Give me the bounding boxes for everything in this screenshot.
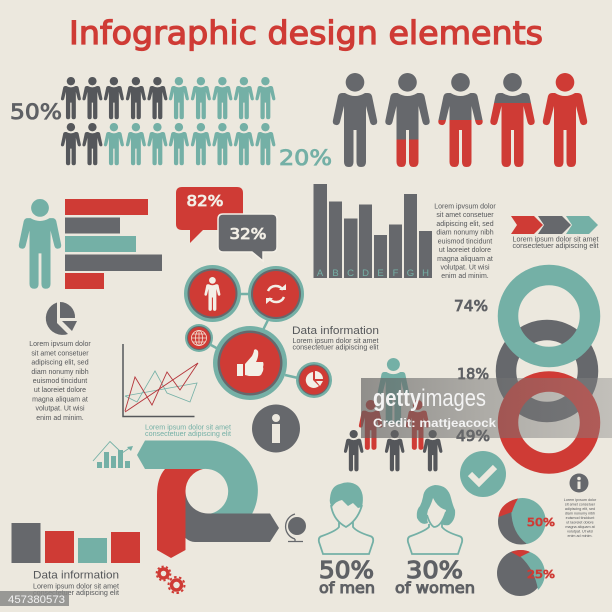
text block: tiny notes: enim ad minim. bbox=[567, 534, 593, 538]
text block: tiny notes: magna aliquam at bbox=[565, 525, 595, 529]
node: thumbs up bbox=[213, 326, 287, 400]
watermark band: gettyimages bbox=[373, 385, 486, 412]
speech bubble: 82%: 82% bbox=[186, 192, 224, 210]
statistic: 30% of women bbox=[395, 558, 475, 597]
text block: bar chart notes: magna aliquam at bbox=[437, 256, 493, 263]
bar chart A-H: G bbox=[407, 268, 414, 279]
bar chart A-H: C bbox=[347, 268, 354, 279]
speech bubble: 32% bbox=[218, 214, 277, 261]
text block: left notes: ut laoreiet dolore bbox=[34, 387, 86, 394]
speech bubble: 82% bbox=[176, 187, 243, 243]
heading: Data information: Data information bbox=[292, 325, 379, 337]
pie chart: 50%: 50% bbox=[527, 516, 555, 529]
statistic: 50% of men: of men bbox=[319, 579, 375, 597]
image id tag bbox=[0, 591, 69, 606]
text block: tiny notes: volutpat. Ut wisi bbox=[567, 530, 593, 534]
bar chart A-H: B bbox=[332, 268, 339, 279]
pie chart: 25%: 25% bbox=[527, 568, 555, 581]
node: person bbox=[184, 265, 241, 322]
text block: teal caption: Lorem ipsum dolor sit amet bbox=[145, 424, 231, 432]
icon: small info bbox=[570, 474, 588, 492]
text block: chevron caption: consectetuer adipiscing elit bbox=[512, 243, 599, 250]
text block: tiny notes: adipiscing elit, sed bbox=[565, 507, 595, 511]
people group: hierarchy bbox=[344, 358, 442, 471]
text block: tiny notes: Lorem ipvsum dolor bbox=[564, 498, 597, 502]
text block: bar chart notes: euismod tincidunt bbox=[438, 238, 492, 246]
statistic: 50% of men: 50% bbox=[319, 558, 374, 584]
bar chart A-H: D bbox=[362, 268, 369, 279]
icon: teal person bbox=[19, 199, 61, 289]
bar chart A-H: E bbox=[377, 268, 384, 279]
icon: info circle bbox=[252, 404, 300, 452]
bar chart A-H: H bbox=[422, 268, 429, 279]
title: Infographic design elements bbox=[69, 14, 543, 52]
horizontal bar chart bbox=[65, 199, 162, 289]
text block: tiny notes: euismod tincidunt bbox=[566, 516, 594, 520]
bar chart A-H bbox=[314, 184, 432, 279]
label: 50%: 50% bbox=[10, 100, 62, 124]
icon: chart trend bbox=[93, 442, 133, 468]
text block: bar chart notes: volutpat. Ut wisi bbox=[440, 264, 490, 272]
text block: tiny notes: sit amet consetuer bbox=[565, 502, 596, 506]
text block: left notes: adipiscing elit, sed bbox=[31, 360, 89, 366]
text block: bar chart notes: enim ad minim. bbox=[441, 273, 489, 280]
pictogram: small people rows bbox=[61, 77, 275, 165]
donut chart: overlapping rings bbox=[506, 275, 590, 464]
chevron arrows bbox=[511, 216, 598, 234]
text block: tiny notes bbox=[564, 498, 597, 538]
network connectors bbox=[211, 294, 298, 378]
text block: chevron caption bbox=[512, 236, 599, 250]
watermark band: Credit: mattjeacock bbox=[373, 416, 496, 430]
text block: bar chart notes: sit amet consetuer bbox=[436, 212, 494, 219]
pictogram: five large people filling with red bbox=[333, 73, 587, 167]
bar chart A-H: A bbox=[317, 268, 324, 279]
text block: bottom data information: Lorem ipsum dolor sit amet bbox=[33, 584, 119, 590]
text block: chevron caption: Lorem ipsum dolor sit amet bbox=[512, 236, 599, 244]
text block: data information: Lorem ipsum dolor sit amet bbox=[292, 338, 379, 345]
node: pie bbox=[296, 362, 332, 398]
text block: data information: consectetuer adipiscing elit bbox=[292, 344, 379, 352]
label: 49%: 49% bbox=[456, 427, 490, 445]
text block: teal caption: consectetuer adipiscing elit bbox=[145, 431, 231, 438]
text block: tiny notes: ut laoreiet dolore bbox=[566, 520, 594, 524]
text block: bar chart notes: Lorem ipvsum dolor bbox=[434, 204, 496, 210]
node: globe bbox=[185, 324, 213, 352]
text block: data information bbox=[292, 338, 379, 352]
watermark band bbox=[361, 378, 612, 438]
text block: left notes bbox=[29, 341, 91, 422]
text block: left notes: euismod tincidunt bbox=[33, 378, 87, 385]
icon: pie chart bbox=[46, 302, 77, 335]
text block: bar chart notes: diam nonumy nibh bbox=[436, 230, 494, 236]
text block: left notes: sit amet consetuer bbox=[31, 350, 89, 358]
text block: tiny notes: diam nonumy nibh bbox=[565, 512, 595, 516]
pie chart: 25% bbox=[497, 550, 555, 596]
text block: teal caption bbox=[145, 424, 231, 438]
icon: desk globe bbox=[286, 514, 306, 542]
icon: man bust bbox=[319, 482, 373, 554]
speech bubble: 32%: 32% bbox=[230, 225, 266, 243]
column chart: bottom left bbox=[12, 523, 140, 563]
label: 18%: 18% bbox=[457, 365, 489, 383]
icon: check circle bbox=[460, 451, 506, 497]
text block: bottom data information: consectetuer adipiscing elit bbox=[33, 590, 119, 597]
label: 20%: 20% bbox=[279, 146, 332, 170]
heading: Data information bottom: Data information bbox=[33, 570, 119, 582]
text block: bar chart notes bbox=[434, 204, 496, 280]
image id tag: 457380573 bbox=[8, 594, 65, 606]
bar chart A-H: F bbox=[393, 268, 399, 279]
statistic: 50% of men bbox=[319, 558, 375, 597]
node: refresh bbox=[248, 266, 304, 322]
text block: left notes: volutpat. Ut wisi bbox=[35, 406, 85, 412]
line chart bbox=[123, 344, 198, 416]
text block: left notes: magna aliquam at bbox=[32, 396, 88, 404]
text block: left notes: Lorem ipvsum dolor bbox=[29, 341, 91, 348]
statistic: 30% of women: 30% bbox=[406, 558, 463, 584]
icon: woman bust bbox=[408, 485, 462, 554]
text block: bar chart notes: ut laoreiet dolore bbox=[439, 247, 491, 254]
text block: bar chart notes: adipiscing elit, sed bbox=[436, 221, 494, 228]
label: 74%: 74% bbox=[454, 297, 488, 315]
statistic: 30% of women: of women bbox=[395, 579, 475, 597]
pie chart: 50% bbox=[498, 498, 555, 544]
flow arrow: teal, red and grey ribbon bbox=[137, 440, 279, 558]
text block: bottom data information bbox=[33, 584, 119, 597]
text block: left notes: diam nonumy nibh bbox=[31, 369, 89, 376]
text block: left notes: enim ad minim. bbox=[36, 415, 84, 422]
icon: gears bbox=[156, 566, 184, 593]
